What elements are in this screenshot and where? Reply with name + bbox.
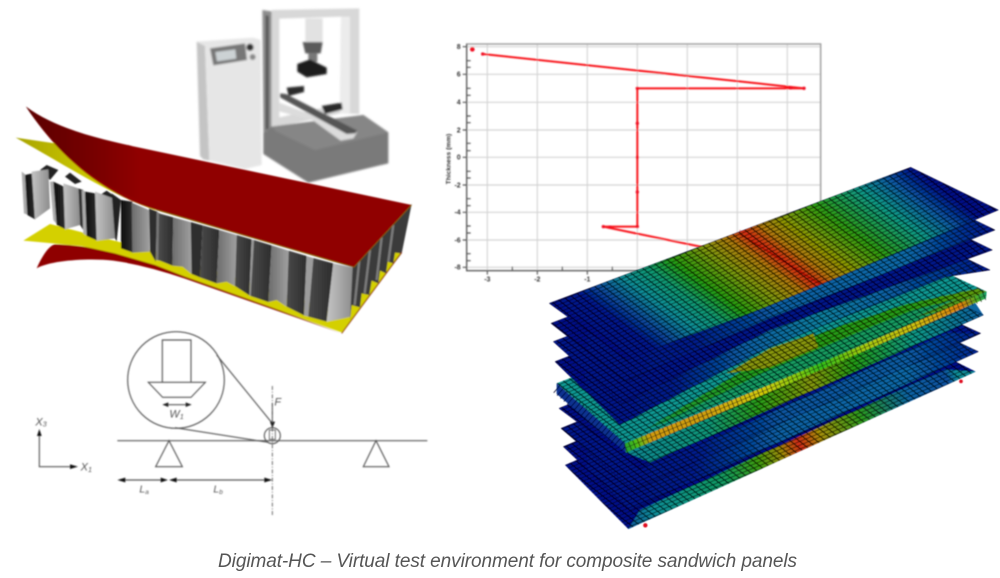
- y axis labels: 0: [457, 155, 461, 162]
- plate 9: [565, 328, 976, 529]
- y axis labels: 6: [457, 72, 461, 79]
- centre line: [271, 386, 274, 515]
- magnified detail circle: 1: [180, 412, 184, 421]
- plate 3: [553, 207, 992, 403]
- machine beam: [279, 86, 357, 141]
- x axis labels: -2: [534, 277, 541, 284]
- dimension lines: a: [145, 489, 149, 496]
- dimension lines: L: [139, 485, 145, 496]
- slab end face: [557, 383, 626, 453]
- bottom red face sheet: [37, 244, 342, 333]
- y axis labels: 4: [457, 100, 461, 107]
- testing machine photo: [197, 8, 388, 183]
- chart grid: [467, 44, 821, 271]
- through-thickness stress chart: [445, 44, 821, 284]
- caption: Digimat-HC – Virtual test environment for composite sandwich panels: [218, 551, 798, 572]
- dimension lines: [117, 478, 272, 496]
- magnified detail circle: W: [169, 409, 180, 421]
- right support: [363, 441, 389, 467]
- left support: [156, 441, 182, 467]
- top red face sheet: [26, 107, 412, 267]
- slab long face: [625, 292, 987, 453]
- y axis labels: -8: [454, 265, 461, 272]
- coordinate axes: X: [81, 462, 88, 474]
- side wall of core: [342, 204, 412, 333]
- axis ticks: [463, 44, 821, 275]
- honeycomb sandwich panel: [16, 107, 412, 333]
- y axis labels: -6: [454, 237, 461, 244]
- machine frame: [262, 8, 359, 133]
- y axis labels: -2: [454, 182, 461, 189]
- plate 6: [559, 273, 983, 468]
- magnified detail circle: [128, 332, 224, 428]
- load markers: [643, 379, 963, 527]
- y axis labels: -4: [454, 210, 461, 217]
- plate 7: [561, 293, 981, 490]
- coordinate axes: 3: [43, 420, 48, 429]
- plate 4: [555, 227, 990, 425]
- control cabinet: [197, 38, 262, 169]
- y axis labels: [454, 44, 461, 272]
- bending test schematic: [34, 332, 427, 515]
- x axis labels: [484, 277, 591, 284]
- load point: [264, 396, 282, 444]
- bottom yellow face sheet: [23, 224, 353, 332]
- y axis labels: 8: [457, 44, 461, 51]
- dimension lines: b: [219, 489, 223, 496]
- coordinate axes: X: [35, 416, 43, 428]
- slab top face: [557, 250, 987, 443]
- x axis labels: -1: [584, 277, 591, 284]
- plate 2: [551, 187, 995, 382]
- FEM stacked plates: [549, 167, 998, 529]
- x axis labels: -3: [484, 277, 491, 284]
- beam: [117, 439, 427, 442]
- zoom guide lines: [175, 355, 272, 442]
- machine base: [263, 115, 388, 183]
- plate 8: [563, 310, 978, 510]
- plate 1 top: [549, 167, 998, 360]
- coordinate axes: [34, 416, 92, 474]
- dimension lines: L: [213, 485, 219, 496]
- top yellow face sheet: [16, 138, 157, 211]
- red sheet shaded bend: [26, 107, 140, 200]
- load point: F: [274, 396, 282, 408]
- y axis labels: 2: [457, 127, 461, 134]
- machine piston: [297, 18, 327, 77]
- chart frame: [467, 44, 821, 271]
- thick slab plate: [557, 250, 987, 453]
- honeycomb core cells: [22, 165, 353, 322]
- stress curve: [470, 47, 806, 250]
- y axis title: Thickness (mm): [445, 134, 452, 184]
- coordinate axes: 1: [88, 465, 92, 474]
